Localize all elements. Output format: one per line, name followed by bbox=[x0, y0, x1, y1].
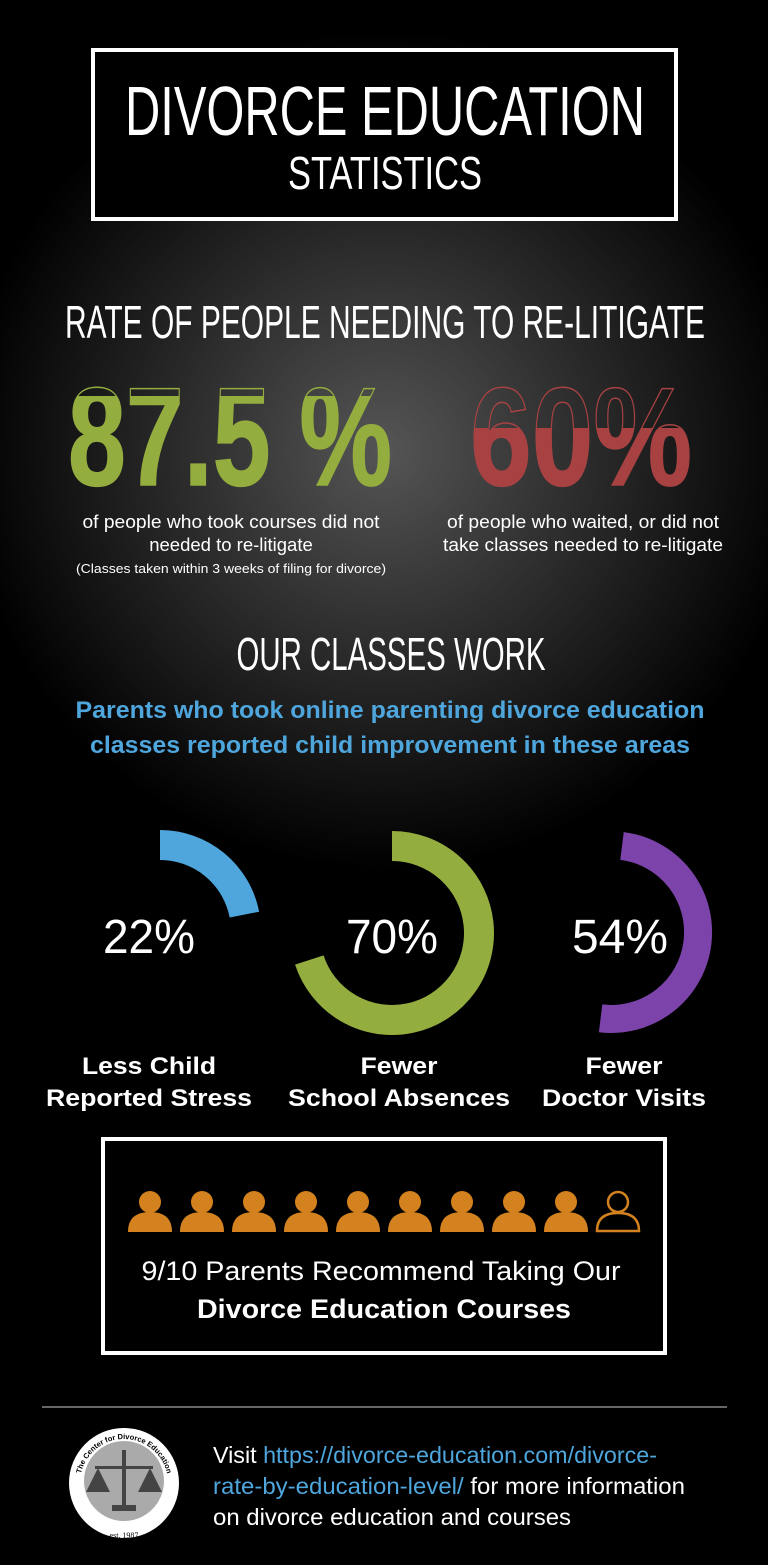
title box bbox=[93, 50, 676, 219]
donut: 22%: Less Child bbox=[82, 1053, 216, 1080]
subheading blue bbox=[76, 697, 704, 759]
donut: 70% bbox=[288, 846, 510, 1112]
stat: 60%: take classes needed to re-litigate bbox=[443, 534, 723, 555]
subheading blue: classes reported child improvement in these areas bbox=[90, 732, 690, 759]
heading: our classes work: OUR CLASSES WORK bbox=[236, 628, 546, 680]
subheading blue: Parents who took online parenting divorce education bbox=[76, 697, 704, 724]
stat: 60%: of people who waited, or did not bbox=[447, 511, 719, 532]
donut: 54%: Fewer bbox=[586, 1053, 662, 1080]
logo: The Center for Divorce Education bbox=[76, 1434, 171, 1474]
donut: 22%: 22% bbox=[103, 911, 195, 964]
donut: 70%: 70% bbox=[346, 911, 438, 964]
recommend box: Divorce Education Courses bbox=[197, 1294, 571, 1324]
stat: 87.5%: (Classes taken within 3 weeks of filing for divorce) bbox=[76, 562, 386, 576]
footer text: rate-by-education-level/ for more information bbox=[213, 1473, 685, 1499]
title box: STATISTICS bbox=[288, 147, 482, 199]
donut: 70%: Fewer bbox=[360, 1053, 438, 1080]
recommend box bbox=[103, 1139, 665, 1353]
recommend box: 9/10 Parents Recommend Taking Our bbox=[142, 1256, 620, 1286]
footer text: on divorce education and courses bbox=[213, 1504, 571, 1530]
footer text: Visit https://divorce-education.com/divorce- bbox=[213, 1442, 657, 1468]
donut: 54% bbox=[542, 846, 706, 1112]
donut: 22%: Reported Stress bbox=[46, 1085, 252, 1112]
donut: 22% bbox=[46, 845, 252, 1112]
logo bbox=[69, 1428, 179, 1540]
stat: 87.5%: 87.5 % bbox=[68, 358, 392, 515]
donut: 54%: Doctor Visits bbox=[542, 1085, 706, 1112]
icons: people bbox=[128, 1191, 639, 1232]
donut: 54%: 54% bbox=[572, 911, 668, 964]
stat: 87.5%: of people who took courses did not bbox=[82, 511, 380, 532]
stat: 60%: 60% bbox=[470, 358, 692, 515]
stat: 60%: 60% bbox=[470, 358, 692, 515]
stat: 87.5%: 87.5 % bbox=[68, 358, 392, 515]
donut: 70%: School Absences bbox=[288, 1085, 510, 1112]
footer text bbox=[213, 1442, 685, 1530]
logo: est. 1987 bbox=[110, 1531, 138, 1540]
stat: 60% bbox=[443, 386, 722, 555]
stat: 87.5%: needed to re-litigate bbox=[149, 534, 313, 555]
stat: 87.5% bbox=[70, 386, 390, 576]
